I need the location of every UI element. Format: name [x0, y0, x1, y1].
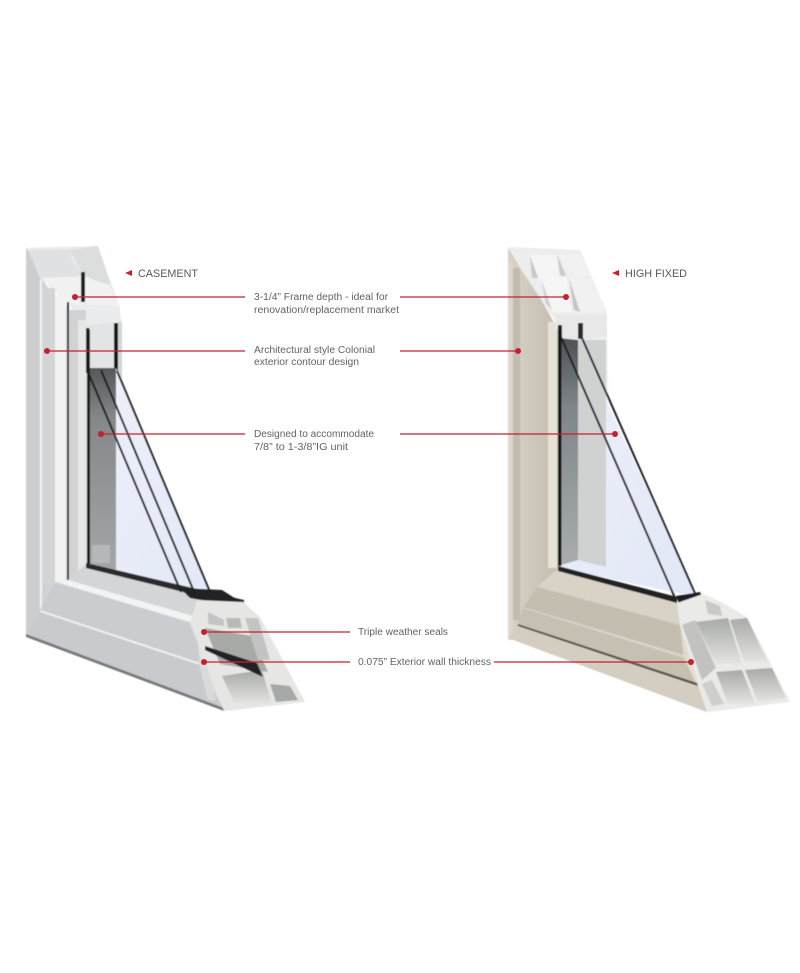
casement bottom cross-section: [190, 600, 305, 711]
casement frame front face: [26, 248, 262, 710]
casement sill face: [26, 565, 250, 711]
callout: IG unit: Designed to accommodate: [254, 429, 374, 440]
casement glass panes: [88, 370, 210, 594]
high fixed heading: HIGH FIXED: [625, 268, 687, 280]
callout: frame depth: renovation/replacement market: [254, 305, 399, 316]
high fixed frame front face: [508, 248, 707, 712]
casement top cross-section: [27, 246, 122, 382]
high fixed top cross-section: [508, 247, 608, 403]
casement stile lines: [40, 280, 86, 610]
callout: wall thickness: [201, 657, 694, 668]
callout: IG unit: [98, 429, 618, 453]
casement heading: CASEMENT: [138, 268, 198, 280]
high fixed glass panes: [561, 337, 697, 598]
callout: weather seals: [201, 627, 448, 638]
callout: frame depth: 3-1/4” Frame depth - ideal for: [254, 292, 389, 303]
casement window illustration: [26, 246, 305, 711]
high fixed glazing: [558, 330, 706, 612]
callout: IG unit: 7/8” to 1-3/8”IG unit: [254, 442, 348, 453]
callout: exterior contour: [44, 345, 521, 368]
callout: exterior contour: Architectural style Colonial: [254, 345, 375, 356]
callout: wall thickness: 0.075” Exterior wall thickness: [358, 657, 491, 668]
high fixed stile lines: [508, 262, 557, 640]
callout: frame depth: [72, 292, 569, 316]
casement glazing: [86, 330, 244, 608]
high fixed bottom cross-section: [677, 594, 790, 712]
callout: exterior contour: exterior contour design: [254, 357, 359, 368]
high fixed window illustration: [508, 247, 790, 712]
high fixed sill face: [508, 568, 707, 712]
callout: weather seals: Triple weather seals: [358, 627, 448, 638]
